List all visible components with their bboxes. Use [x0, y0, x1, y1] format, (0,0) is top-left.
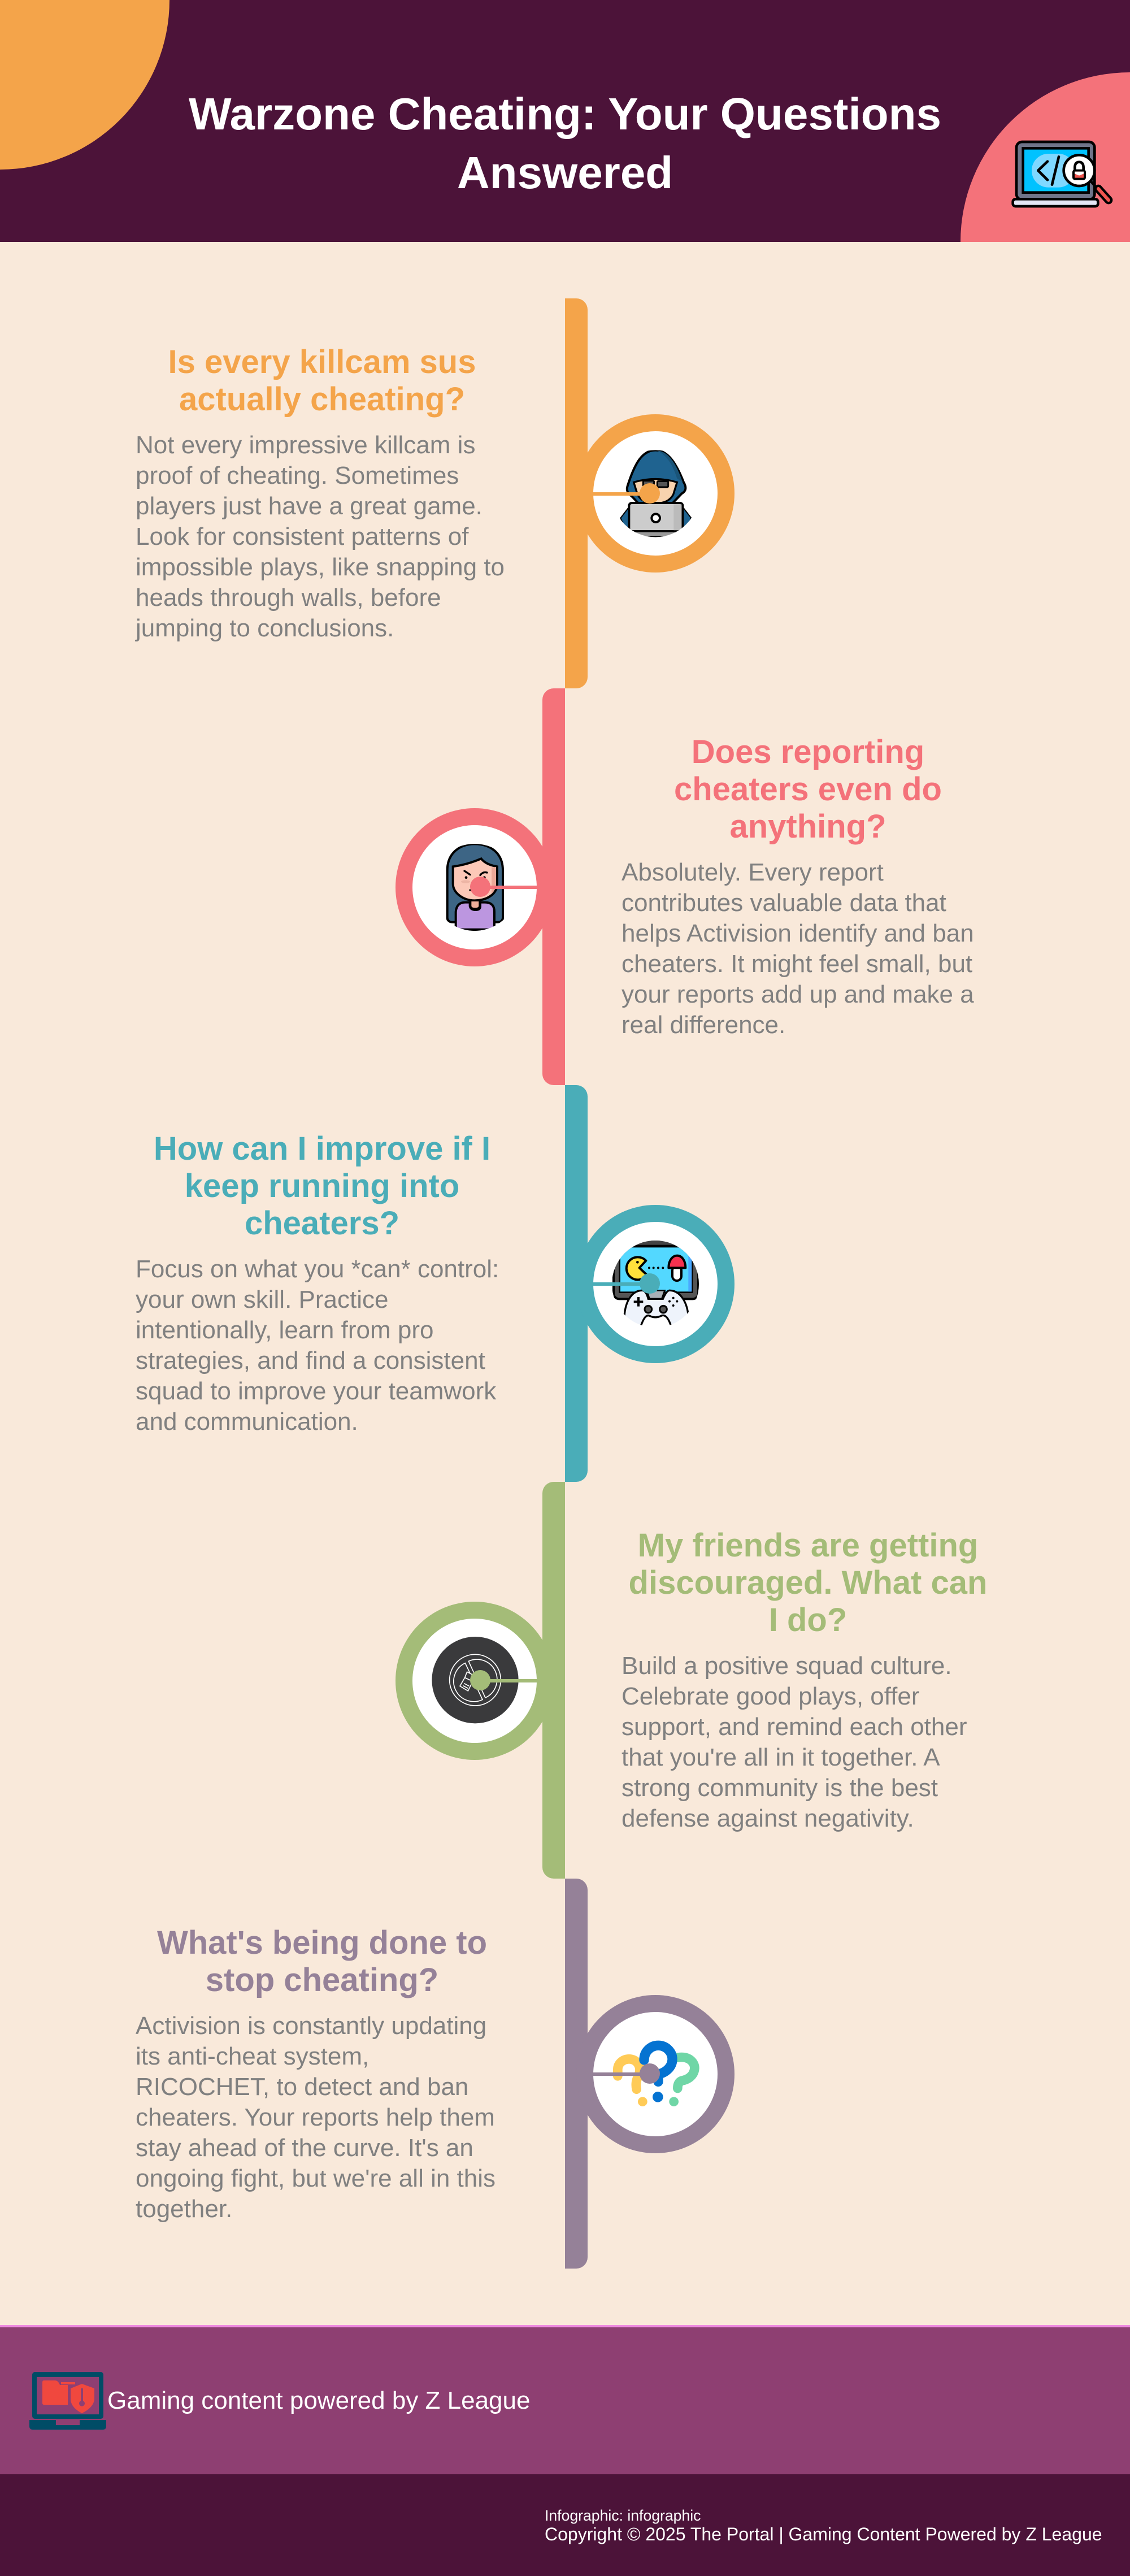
- body text: heads through walls, before: [136, 584, 441, 612]
- footer text: Gaming content powered by Z League: [107, 2387, 530, 2414]
- body text: helps Activision identify and ban: [621, 920, 974, 947]
- header banner: [0, 0, 1130, 242]
- body text: Celebrate good plays, offer: [621, 1682, 920, 1710]
- icon: angry girl: [447, 844, 503, 931]
- heading: keep running into: [185, 1168, 459, 1204]
- icon ring: [395, 1602, 554, 1760]
- heading: [154, 1130, 490, 1242]
- body text: impossible plays, like snapping to: [136, 553, 505, 581]
- heading: How can I improve if I: [154, 1130, 490, 1167]
- timeline bar: [565, 298, 588, 688]
- timeline bar: [565, 1879, 588, 2269]
- connector line and dot: [470, 1670, 537, 1690]
- heading: anything?: [729, 808, 886, 845]
- title: [189, 89, 941, 198]
- icon: question marks: [618, 2045, 694, 2106]
- icon ring: [576, 414, 734, 573]
- timeline bar: [542, 688, 565, 1085]
- title: Answered: [457, 148, 673, 198]
- body text: its anti-cheat system,: [136, 2042, 369, 2070]
- icon ring: [576, 1995, 734, 2153]
- body text: intentionally, learn from pro: [136, 1316, 433, 1344]
- icon: hooded hacker at laptop: [620, 450, 691, 537]
- timeline bar: [542, 1482, 565, 1879]
- heading: cheaters even do: [674, 771, 942, 808]
- timeline bar: [565, 1085, 588, 1482]
- heading: What's being done to: [157, 1924, 487, 1961]
- body text: together.: [136, 2195, 232, 2223]
- body text: [136, 1255, 499, 1436]
- body text: and communication.: [136, 1408, 358, 1436]
- decorative orange circle: [0, 0, 169, 170]
- panel: question 1: [134, 298, 734, 688]
- body text: Focus on what you *can* control:: [136, 1255, 499, 1283]
- body text: support, and remind each other: [621, 1713, 967, 1741]
- heading: [629, 1527, 987, 1638]
- panel: question 2: [395, 688, 974, 1085]
- body text: proof of cheating. Sometimes: [136, 462, 459, 489]
- heading: [157, 1924, 487, 1998]
- body text: Activision is constantly updating: [136, 2012, 486, 2040]
- icon: laptop with magnifier and lock: [1013, 142, 1109, 206]
- body text: your reports add up and make a: [621, 981, 974, 1008]
- body text: your own skill. Practice: [136, 1286, 388, 1313]
- body text: that you're all in it together. A: [621, 1744, 940, 1771]
- heading: actually cheating?: [179, 381, 465, 418]
- title: Warzone Cheating: Your Questions: [189, 89, 941, 139]
- body text: Look for consistent patterns of: [136, 523, 468, 550]
- body text: [621, 858, 974, 1039]
- body text: strong community is the best: [621, 1774, 938, 1802]
- heading: [674, 734, 942, 845]
- body text: Build a positive squad culture.: [621, 1652, 952, 1680]
- panel: question 3: [136, 1085, 734, 1482]
- icon ring: [395, 808, 554, 966]
- panel: question 4: [395, 1482, 987, 1879]
- decorative pink circle: [960, 72, 1130, 411]
- icon: no flashlight badge: [432, 1637, 519, 1723]
- body text: Not every impressive killcam is: [136, 431, 475, 459]
- body text: players just have a great game.: [136, 492, 483, 520]
- body text: jumping to conclusions.: [136, 614, 394, 642]
- connector line and dot: [593, 2063, 660, 2084]
- body text: real difference.: [621, 1011, 785, 1039]
- body text: ongoing fight, but we're all in this: [136, 2165, 496, 2192]
- panel: question 5: [136, 1879, 734, 2269]
- body text: contributes valuable data that: [621, 889, 946, 917]
- copyright: Copyright © 2025 The Portal | Gaming Content Powered by Z League: [545, 2524, 1102, 2544]
- body text: squad to improve your teamwork: [136, 1377, 496, 1405]
- heading: Is every killcam sus: [168, 344, 476, 380]
- body text: stay ahead of the curve. It's an: [136, 2134, 473, 2162]
- body text: [134, 431, 505, 642]
- body text: [136, 2012, 496, 2223]
- body text: cheaters. Your reports help them: [136, 2104, 495, 2131]
- body text: Absolutely. Every report: [621, 858, 884, 886]
- heading: My friends are getting: [638, 1527, 978, 1564]
- heading: cheaters?: [245, 1205, 399, 1242]
- heading: Does reporting: [692, 734, 924, 770]
- icon: game monitor and controller: [612, 1239, 699, 1330]
- infographic label: Infographic: infographic: [545, 2507, 701, 2524]
- body text: [621, 1652, 967, 1832]
- body text: cheaters. It might feel small, but: [621, 950, 972, 978]
- body text: RICOCHET, to detect and ban: [136, 2073, 468, 2101]
- body text: defense against negativity.: [621, 1805, 914, 1832]
- body text: strategies, and find a consistent: [136, 1347, 485, 1374]
- footer band: [0, 2325, 1130, 2474]
- icon: laptop with folder and shield: [29, 2372, 106, 2430]
- heading: discouraged. What can: [629, 1564, 987, 1601]
- connector line and dot: [470, 877, 537, 897]
- heading: stop cheating?: [206, 1962, 438, 1998]
- footer credits: [0, 2474, 1130, 2576]
- icon ring: [576, 1205, 734, 1363]
- connector line and dot: [593, 1273, 660, 1294]
- connector line and dot: [593, 483, 660, 504]
- heading: I do?: [769, 1602, 847, 1638]
- heading: [168, 344, 476, 418]
